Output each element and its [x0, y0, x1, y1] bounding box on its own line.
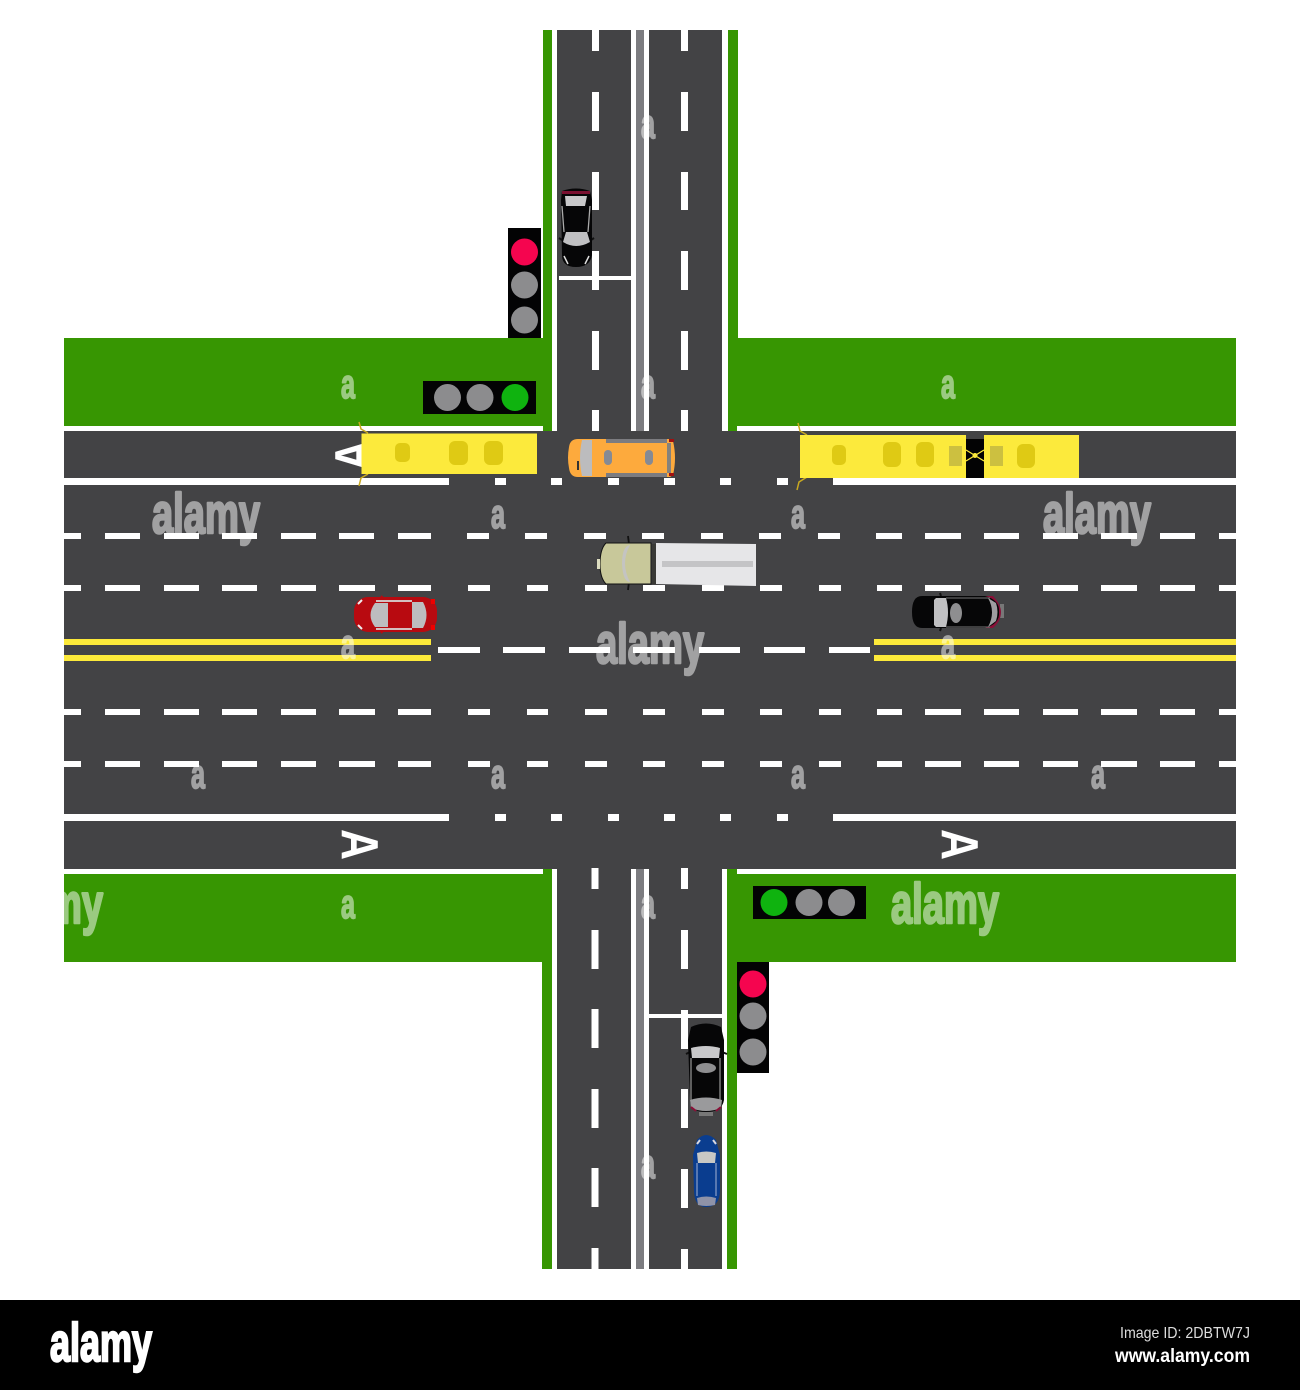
lane dashes: vertical road: [595, 30, 684, 1269]
watermarks: large alamy logos: alamy: [596, 612, 704, 676]
image id: Image ID: 2DBTW7J: [1120, 1325, 1250, 1342]
traffic light: right, green: [753, 886, 866, 919]
blue car: [693, 1135, 720, 1207]
watermarks: small letters: a: [491, 751, 506, 797]
delivery truck: [597, 536, 756, 590]
watermarks: small letters: a: [941, 621, 956, 667]
watermarks: small letters: a: [641, 361, 656, 407]
watermarks: small letters: a: [341, 621, 356, 667]
bus lane letters: [325, 440, 988, 860]
watermarks: small letters: a: [791, 751, 806, 797]
watermarks: large alamy logos: alamy: [891, 872, 999, 936]
watermarks: small letters: a: [641, 881, 656, 927]
bus lane letters: A: [930, 829, 988, 860]
black car: right: [912, 593, 1004, 631]
watermarks: large alamy logos: alamy: [1043, 482, 1151, 546]
watermarks: small letters: a: [491, 491, 506, 537]
footer logo: alamy: [50, 1313, 152, 1373]
footer bar: [0, 1300, 1300, 1390]
watermarks: large alamy logos: alamy: [152, 482, 260, 546]
watermarks: small letters: a: [341, 361, 356, 407]
watermarks: small letters: a: [641, 1141, 656, 1187]
website: www.alamy.com: [1114, 1346, 1250, 1367]
traffic light: top, red: [508, 228, 541, 338]
stop lines: [559, 276, 722, 1018]
articulated yellow bus: right: [797, 423, 1079, 490]
watermarks: small letters: a: [1091, 751, 1106, 797]
red car: [354, 596, 437, 633]
traffic light: left, green: [423, 381, 536, 414]
watermarks: small letters: a: [641, 101, 656, 147]
black car: bottom: [686, 1024, 727, 1116]
yellow bus: left: [359, 422, 537, 486]
watermarks: small letters: a: [791, 491, 806, 537]
orange minibus: [568, 439, 675, 477]
bus lane letters: A: [330, 829, 388, 860]
watermarks: small letters: a: [191, 751, 206, 797]
lane dashes: horizontal road: [64, 536, 1236, 764]
crosswalk dots: [495, 478, 788, 821]
watermarks: small letters: [191, 101, 1106, 1187]
watermarks: small letters: a: [941, 361, 956, 407]
double yellow centre lines: [64, 639, 1236, 661]
watermarks: large alamy logos: [0, 482, 1151, 936]
watermarks: small letters: a: [341, 881, 356, 927]
bus lane letters: A: [325, 440, 383, 471]
black car: top: [559, 188, 594, 267]
traffic light: bottom, red: [737, 962, 769, 1073]
